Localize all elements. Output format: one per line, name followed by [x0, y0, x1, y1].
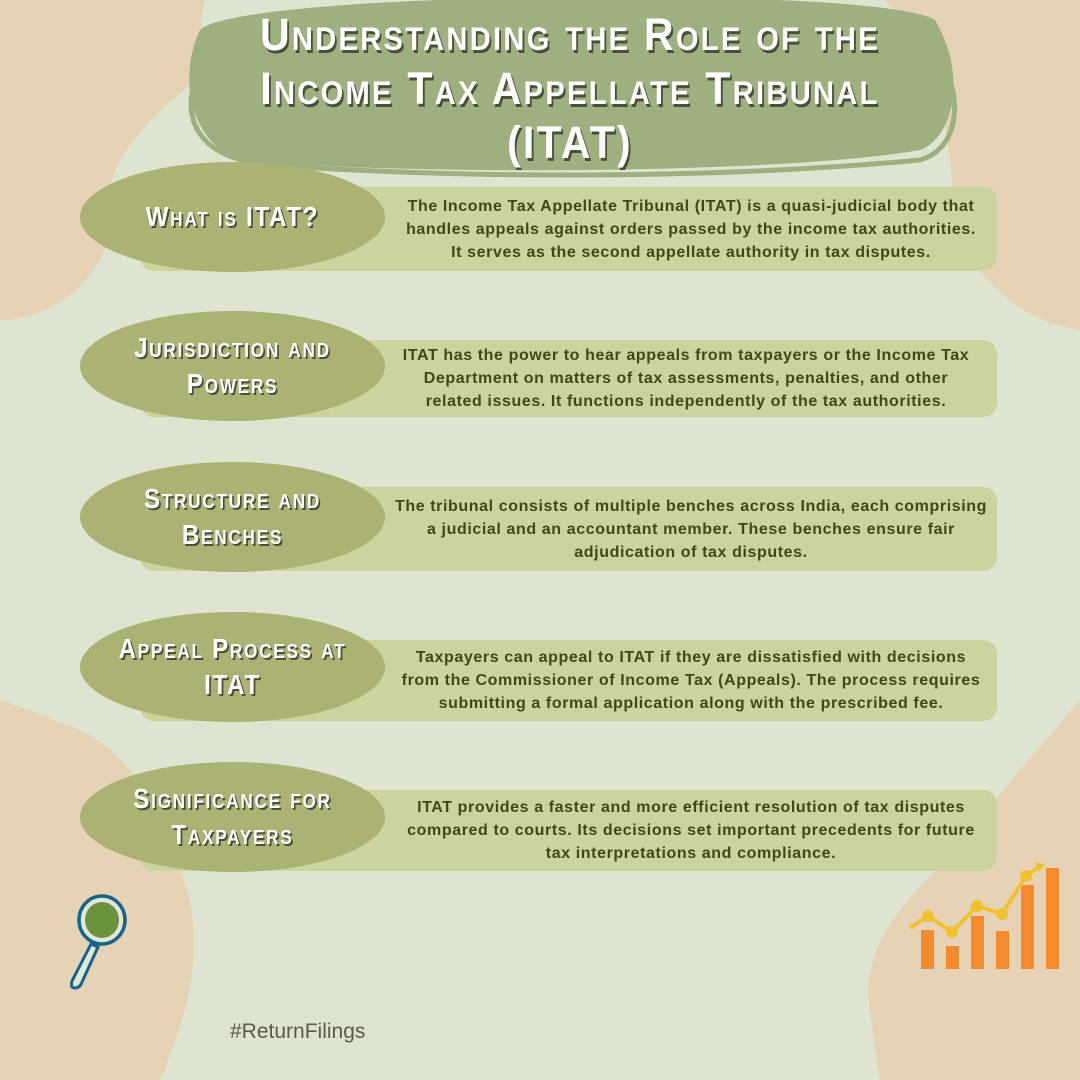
- panel background: [140, 640, 997, 721]
- text block: [395, 498, 987, 560]
- panel: appeal process: [80, 612, 997, 722]
- text block: [407, 799, 975, 862]
- heading: ITAT: [204, 669, 261, 700]
- title: Understanding the Role of the: [260, 9, 880, 60]
- heading: [80, 612, 385, 722]
- panel background: [140, 487, 997, 571]
- heading: [80, 762, 385, 872]
- heading: Taxpayers: [172, 819, 293, 850]
- heading: [80, 462, 385, 572]
- icon: bar chart: [909, 862, 1059, 969]
- text block: Taxpayers can appeal to ITAT if they are dissatisfied with decisions: [416, 649, 966, 666]
- text block: related issues. It functions independently of the tax authorities.: [426, 393, 946, 410]
- text block: ITAT provides a faster and more efficient resolution of tax disputes: [417, 799, 965, 816]
- title: [260, 9, 880, 170]
- text block: tax interpretations and compliance.: [546, 845, 836, 862]
- heading: What is ITAT?: [146, 201, 319, 232]
- text block: [403, 347, 969, 410]
- text block: submitting a formal application along with the prescribed fee.: [439, 695, 943, 712]
- hashtag: #ReturnFilings: [230, 1020, 365, 1043]
- text block: [406, 198, 976, 260]
- text block: [402, 649, 980, 712]
- icon: magnifying glass: [70, 894, 127, 990]
- heading: [80, 311, 385, 421]
- text block: a judicial and an accountant member. These benches ensure fair: [427, 520, 955, 538]
- heading: Jurisdiction and: [134, 332, 331, 363]
- panel background: [140, 187, 997, 271]
- panel: jurisdiction: [80, 311, 997, 421]
- text block: adjudication of tax disputes.: [574, 544, 808, 560]
- text block: The tribunal consists of multiple benches across India, each comprising: [395, 498, 987, 514]
- panel: significance: [80, 762, 997, 872]
- heading: Powers: [187, 368, 278, 399]
- panel background: [140, 340, 997, 417]
- panel: structure: [80, 462, 997, 572]
- title: (ITAT): [507, 117, 633, 168]
- panel: what is ITAT: [80, 162, 997, 272]
- text block: Department on matters of tax assessments, penalties, and other: [424, 370, 948, 387]
- heading: Significance for: [133, 783, 332, 814]
- text block: handles appeals against orders passed by the income tax authorities.: [406, 220, 976, 238]
- text block: It serves as the second appellate authority in tax disputes.: [451, 244, 931, 260]
- text block: ITAT has the power to hear appeals from taxpayers or the Income Tax: [403, 347, 969, 364]
- title: Income Tax Appellate Tribunal: [260, 63, 880, 114]
- heading: Benches: [182, 519, 283, 550]
- text block: The Income Tax Appellate Tribunal (ITAT) is a quasi-judicial body that: [408, 198, 974, 214]
- heading: [80, 162, 385, 272]
- title blob: [188, 0, 957, 178]
- text block: compared to courts. Its decisions set important precedents for future: [407, 822, 975, 839]
- heading: Structure and: [144, 483, 321, 514]
- panel background: [140, 790, 997, 871]
- heading: Appeal Process at: [119, 633, 346, 664]
- text block: from the Commissioner of Income Tax (Appeals). The process requires: [402, 672, 980, 689]
